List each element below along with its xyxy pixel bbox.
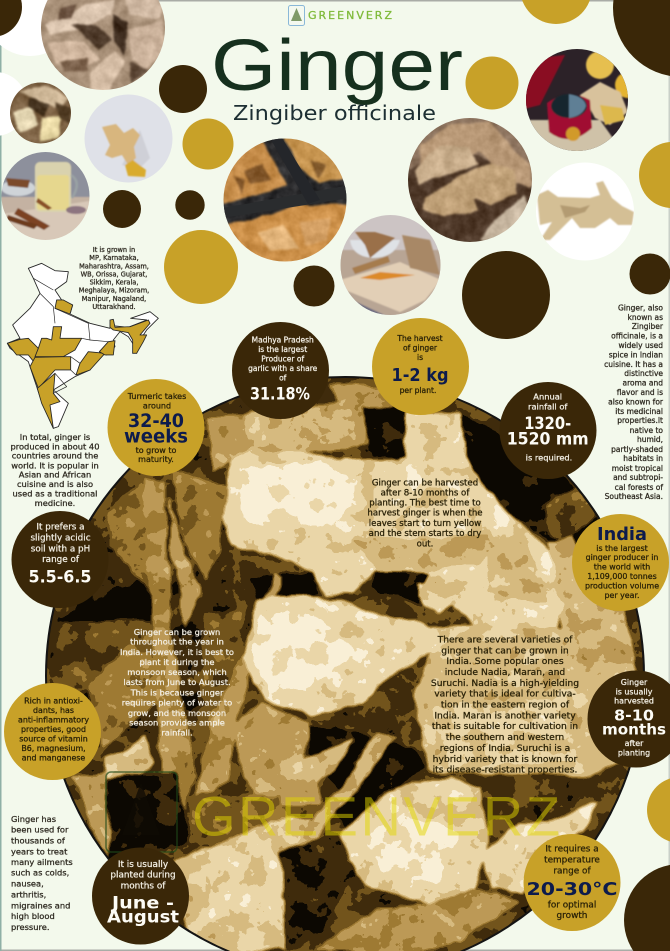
text: about ginger: Zingiber [632, 322, 664, 331]
callout: annual rainfall [500, 382, 596, 479]
text: growing season: season provides ample [129, 718, 225, 728]
callout: India largest producer: 1,109,000 tonnes [587, 572, 657, 581]
text: world production [10, 432, 100, 508]
text: growing season [120, 627, 234, 738]
logo: GREENVERZ [308, 9, 392, 22]
callout: India largest producer [572, 514, 669, 611]
callout: soil pH: 5.5-6.5 [28, 567, 92, 587]
text: where grown: WB, Orissa, Gujarat, [81, 271, 147, 279]
callout: turmeric weeks: maturity. [138, 455, 174, 464]
text: harvest time: harvest ginger is when the [367, 509, 483, 519]
callout: turmeric weeks: around [143, 402, 171, 410]
text: where grown: Uttarakhand. [92, 303, 136, 311]
callout: harvest months: planting [618, 748, 650, 758]
text: where grown: MP, Karnataka, [89, 254, 139, 262]
photo: ginger on white [84, 94, 174, 184]
callout: annual rainfall: 1320- [524, 414, 571, 434]
text: varieties: its disease-resistant properties. [433, 764, 577, 776]
text: harvest time: leaves start to turn yellow [369, 519, 481, 529]
text: about ginger: partly-shaded [611, 445, 663, 454]
text: varieties: India. Maran is another variety [434, 710, 576, 722]
callout: Madhya Pradesh share: garlic with a share [248, 364, 318, 373]
text: growing season: plant it during the [139, 657, 215, 667]
text: where grown: Maharashtra, Assam, [79, 263, 149, 271]
callout: India largest producer: India [597, 524, 647, 545]
text: world production: medicine. [35, 498, 75, 508]
callout: nutrition: anti-inflammatory [18, 716, 89, 724]
callout: soil pH [12, 511, 108, 608]
text: varieties: regions of India. Suruchi is a [440, 743, 570, 754]
text: world production: countries around the [12, 451, 98, 461]
text: traditional uses: been used for [11, 825, 69, 835]
callout: turmeric weeks: 32-40 [128, 410, 184, 432]
callout: nutrition: dants, has [33, 706, 74, 715]
text: world production: Asian and African [19, 470, 91, 480]
text: traditional uses: thousands of [11, 835, 66, 845]
text: about ginger: widely used [618, 341, 663, 350]
text: world production: world. It is popular in [11, 460, 99, 470]
callout: Madhya Pradesh share [232, 322, 329, 419]
callout: Madhya Pradesh share: is the largest [258, 345, 307, 354]
callout: temperature: range of [553, 866, 591, 876]
callout: turmeric weeks: weeks [124, 426, 188, 448]
text: about ginger: properties.It [617, 416, 663, 425]
callout: soil pH: It prefers a [36, 522, 85, 532]
callout: temperature: growth [557, 911, 587, 921]
callout: Madhya Pradesh share: Madhya Pradesh [252, 336, 314, 344]
callout: harvest yield: of ginger [403, 344, 438, 352]
photo: large ginger close-up [408, 118, 532, 242]
text: traditional uses: nausea, [11, 879, 44, 889]
photo: tea cup with ginger and lemon [526, 49, 628, 151]
text: harvest time: out. [417, 539, 433, 549]
text: traditional uses: Ginger has [11, 814, 56, 824]
watermark: GREENVERZ [192, 784, 560, 848]
text: traditional uses [11, 814, 73, 932]
photo: turmeric on cutting board [340, 215, 440, 315]
text: about ginger: officinale, is a [611, 332, 663, 340]
callout: nutrition [4, 683, 101, 780]
callout: temperature: for optimal [548, 900, 596, 910]
callout: planting months: August [107, 908, 179, 928]
callout: harvest yield: 1-2 kg [392, 365, 448, 386]
text: growing season: monsoon season, which [127, 667, 227, 677]
text: growing season: This is because ginger [130, 687, 224, 697]
text: growing season: grow, and the monsoon [128, 708, 226, 718]
text: world production: produced in about 40 [10, 441, 100, 451]
callout: harvest yield: The harvest [396, 334, 443, 343]
text: varieties: variety that is ideal for cultiva- [434, 688, 576, 700]
callout: temperature: It requires a [545, 845, 599, 855]
text: where grown: It is grown in [93, 246, 135, 254]
callout: planting months: planted during [110, 871, 176, 881]
photo: ginger root on white [536, 162, 634, 261]
callout: temperature: 20-30°C [526, 879, 618, 900]
text: where grown: Sikkim, Kerala, [90, 279, 138, 287]
text: growing season: Ginger can be grown [134, 627, 220, 637]
callout: turmeric weeks: Turmeric takes [127, 392, 186, 401]
photo: ginger pile [41, 0, 165, 90]
photo: chopped ginger [10, 82, 71, 144]
text: growing season: lasts from June to August. [123, 677, 231, 687]
callout: harvest yield [372, 318, 469, 415]
text: about ginger: cal forests of [615, 483, 663, 492]
text: about ginger: also known for [608, 398, 664, 406]
map of India [7, 263, 158, 428]
callout: harvest months: harvested [614, 696, 654, 706]
callout: turmeric weeks: to grow to [136, 446, 176, 455]
callout: nutrition: Rich in antioxi- [24, 696, 83, 706]
text: where grown: Manipur, Nagaland, [82, 295, 146, 303]
text: growing season: requires plenty of water to [122, 698, 232, 708]
text: growing season: India. However, it is best to [120, 647, 234, 657]
subtitle: Zingiber officinale [233, 101, 436, 125]
text: traditional uses: high blood [11, 911, 55, 921]
text: traditional uses: pressure. [11, 922, 49, 932]
callout: India largest producer: production volume [585, 582, 659, 590]
text: about ginger: cuisine. It has a [604, 360, 663, 369]
callout: soil pH: slightly acidic [30, 533, 91, 543]
text: world production: cuisine and is also [17, 479, 93, 489]
text: about ginger: flavor and is [617, 388, 663, 397]
callout: harvest months [588, 670, 670, 768]
text: about ginger: and subtropi- [613, 473, 663, 482]
callout: temperature [524, 834, 620, 931]
callout: harvest months: months [602, 720, 666, 738]
logo [288, 6, 392, 26]
callout: planting months: months of [121, 881, 166, 891]
text: about ginger: Southeast Asia. [605, 492, 663, 501]
text: world production: used as a traditional [13, 489, 97, 499]
callout: temperature: temperature [544, 855, 600, 865]
text: world production: In total, ginger is [20, 432, 90, 442]
text: harvest time: after 8-10 months of [381, 489, 470, 499]
callout: annual rainfall: rainfall of [528, 402, 568, 412]
callout: harvest yield: is [417, 353, 423, 362]
text: varieties [431, 634, 579, 776]
main picture: ginger montage [30, 360, 660, 951]
watermark [106, 772, 560, 852]
text: about ginger: Ginger, also [618, 304, 663, 312]
callout: annual rainfall: is required. [526, 452, 572, 462]
callout: annual rainfall: 1520 mm [507, 430, 589, 450]
callout: Madhya Pradesh share: 31.18% [250, 385, 310, 405]
text: harvest time [367, 478, 483, 549]
text: varieties: India. Some popular ones [446, 656, 564, 667]
text: about ginger [604, 304, 664, 501]
text: varieties: the southern and western [446, 732, 564, 743]
text: about ginger: aroma and [622, 378, 663, 388]
callout: soil pH: soil with a pH [31, 544, 90, 554]
text: about ginger: moist tropical [612, 464, 663, 473]
text: where grown: Meghalaya, Mizoram, [79, 287, 149, 295]
text: about ginger: distinctive [624, 369, 663, 378]
callout: planting months: It is usually [118, 860, 168, 870]
text: traditional uses: years to treat [11, 846, 68, 856]
text: about ginger: known as [628, 313, 663, 322]
text: harvest time: planting. The best time to [369, 499, 481, 509]
text: about ginger: habitats in [623, 454, 663, 463]
text: traditional uses: migraines and [11, 900, 70, 910]
callout: harvest months: is usually [616, 688, 653, 696]
callout: India largest producer: per year. [604, 591, 640, 600]
callout: planting months: June - [111, 893, 174, 913]
callout: soil pH: range of [42, 555, 80, 565]
text: harvest time: and the stem starts to dry [369, 529, 481, 539]
photo: ginger tea [2, 152, 90, 240]
callout: annual rainfall: Annual [533, 391, 562, 401]
callout: nutrition: B6, magnesium, [21, 744, 86, 753]
text: growing season: throughout the year in [130, 637, 224, 647]
callout: nutrition: properties, good [21, 725, 86, 734]
callout: nutrition: and manganese [22, 754, 85, 762]
callout: planting months [92, 848, 189, 944]
text: traditional uses: many ailments [11, 857, 73, 867]
callout: harvest months: after [625, 739, 644, 748]
text: varieties: tion in the eastern region of [441, 700, 570, 710]
text: varieties: that is suitable for cultivation in [432, 721, 578, 732]
text: about ginger: native to [630, 426, 663, 435]
text: harvest time: Ginger can be harvested [372, 478, 478, 488]
text: varieties: include Nadia, Maran, and [445, 667, 565, 678]
text: about ginger: its medicinal [615, 407, 663, 416]
callout: nutrition: source of vitamin [19, 734, 88, 744]
text: about ginger: spice in Indian [609, 350, 663, 360]
callout: harvest months: 8-10 [614, 706, 654, 724]
text: varieties: There are several varieties of [437, 634, 573, 646]
text: about ginger: humid, [637, 435, 663, 444]
title: Ginger [211, 26, 463, 106]
callout: harvest months: Ginger [621, 678, 648, 687]
callout: India largest producer: the world with [594, 562, 650, 572]
callout: Madhya Pradesh share: of [279, 374, 287, 382]
callout: India largest producer: ginger producer in [586, 553, 658, 562]
callout: India largest producer: is the largest [596, 544, 648, 553]
callout: harvest yield: per plant. [400, 386, 436, 395]
text: varieties: ginger that can be grown in [441, 646, 569, 656]
text: varieties: hybrid variety that is known for [433, 754, 578, 765]
text: traditional uses: arthritis, [11, 890, 46, 900]
text: growing season: rainfall. [161, 728, 193, 738]
callout: turmeric weeks [108, 379, 204, 476]
text: traditional uses: such as colds, [11, 868, 69, 878]
text: varieties: Suruchi. Nadia is a high-yielding [431, 678, 579, 689]
text: where grown [79, 246, 149, 311]
photo: ginger in market crate [224, 138, 346, 262]
callout: Madhya Pradesh share: Producer of [261, 354, 304, 364]
